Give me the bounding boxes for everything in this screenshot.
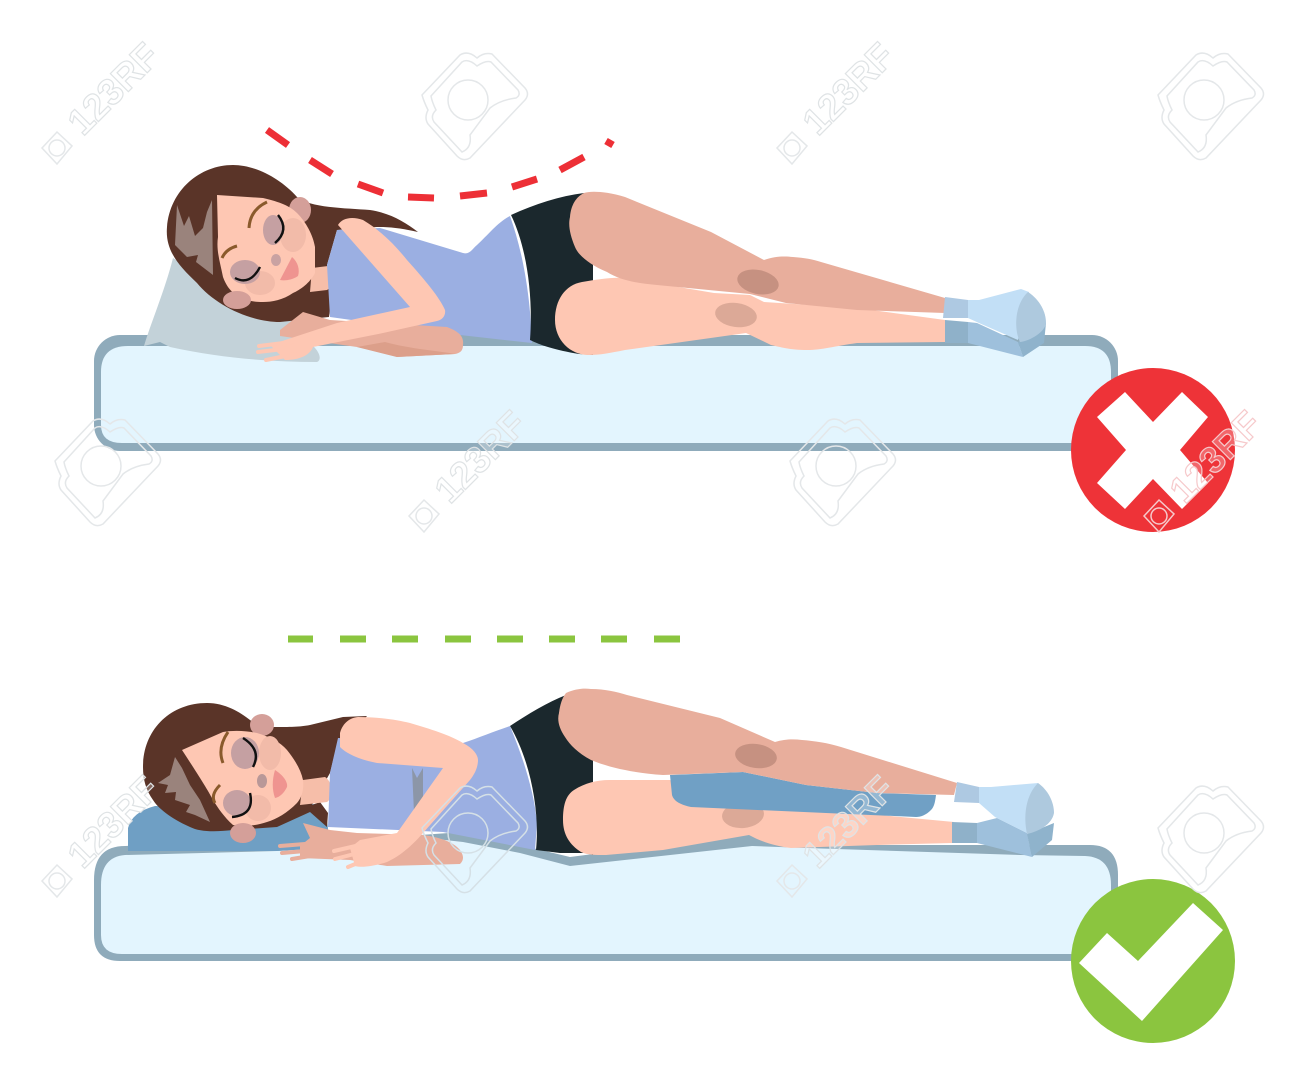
blush — [245, 218, 306, 295]
hair back — [143, 703, 367, 831]
lips — [280, 257, 299, 280]
knee support cushion — [670, 772, 936, 817]
green check badge — [1071, 879, 1235, 1043]
woman sleeping with bent spine — [167, 165, 1046, 360]
nose — [257, 774, 267, 788]
upper sock — [954, 782, 1054, 834]
nose — [271, 254, 281, 266]
watermark: 123RF — [795, 35, 902, 143]
woman sleeping with straight spine — [143, 689, 1054, 867]
watermark — [42, 35, 1269, 897]
shorts — [510, 695, 593, 855]
panel: incorrect sleeping posture — [94, 130, 1235, 532]
shirt — [327, 216, 532, 343]
upper leg — [558, 689, 957, 795]
under arm and hand — [280, 823, 463, 866]
upper sock — [943, 289, 1046, 342]
mattress top — [94, 335, 1118, 451]
red cross badge — [1071, 368, 1235, 532]
watermark: 123RF — [427, 403, 534, 511]
face — [217, 195, 315, 302]
under arm — [280, 312, 463, 357]
pillow — [144, 258, 320, 362]
watermark: 123RF — [1162, 403, 1269, 511]
watermark: 123RF — [60, 768, 167, 876]
lips — [273, 770, 287, 798]
green dashed straight spine line — [288, 636, 680, 642]
ear upper — [289, 197, 311, 223]
shorts — [511, 193, 593, 355]
lower knee shade — [714, 300, 758, 330]
eyelids — [230, 215, 283, 284]
face — [182, 731, 303, 826]
lower sock — [945, 320, 1046, 357]
lower leg — [563, 780, 954, 855]
blush — [245, 736, 281, 821]
eyebrows — [213, 732, 228, 803]
upper knee shade — [735, 266, 781, 298]
red dashed curved spine line — [267, 130, 613, 198]
neck — [310, 266, 334, 292]
eyelids — [223, 737, 259, 816]
lower sock — [952, 818, 1054, 857]
upper arm and hand — [258, 218, 445, 360]
shirt — [328, 726, 537, 850]
panel: correct sleeping posture — [94, 636, 1235, 1043]
lower knee shade — [721, 800, 765, 830]
ear lower — [223, 291, 251, 309]
watermark: 123RF — [795, 768, 902, 876]
orthopedic pillow — [128, 804, 328, 851]
upper leg — [569, 192, 945, 313]
watermark: 123RF — [60, 35, 167, 143]
lower leg — [555, 278, 945, 355]
mattress contoured — [94, 832, 1118, 961]
upper knee shade — [734, 741, 778, 771]
neck — [300, 777, 332, 805]
upper arm and hand — [334, 717, 478, 867]
ear lower — [230, 823, 256, 843]
hair highlight — [175, 200, 213, 275]
eyelashes — [235, 215, 283, 280]
eyebrows — [222, 202, 267, 258]
hair highlight — [158, 757, 210, 822]
ear upper — [250, 714, 274, 736]
hair back — [167, 165, 418, 322]
eyelashes — [232, 738, 256, 817]
shirt shadow — [412, 768, 423, 813]
